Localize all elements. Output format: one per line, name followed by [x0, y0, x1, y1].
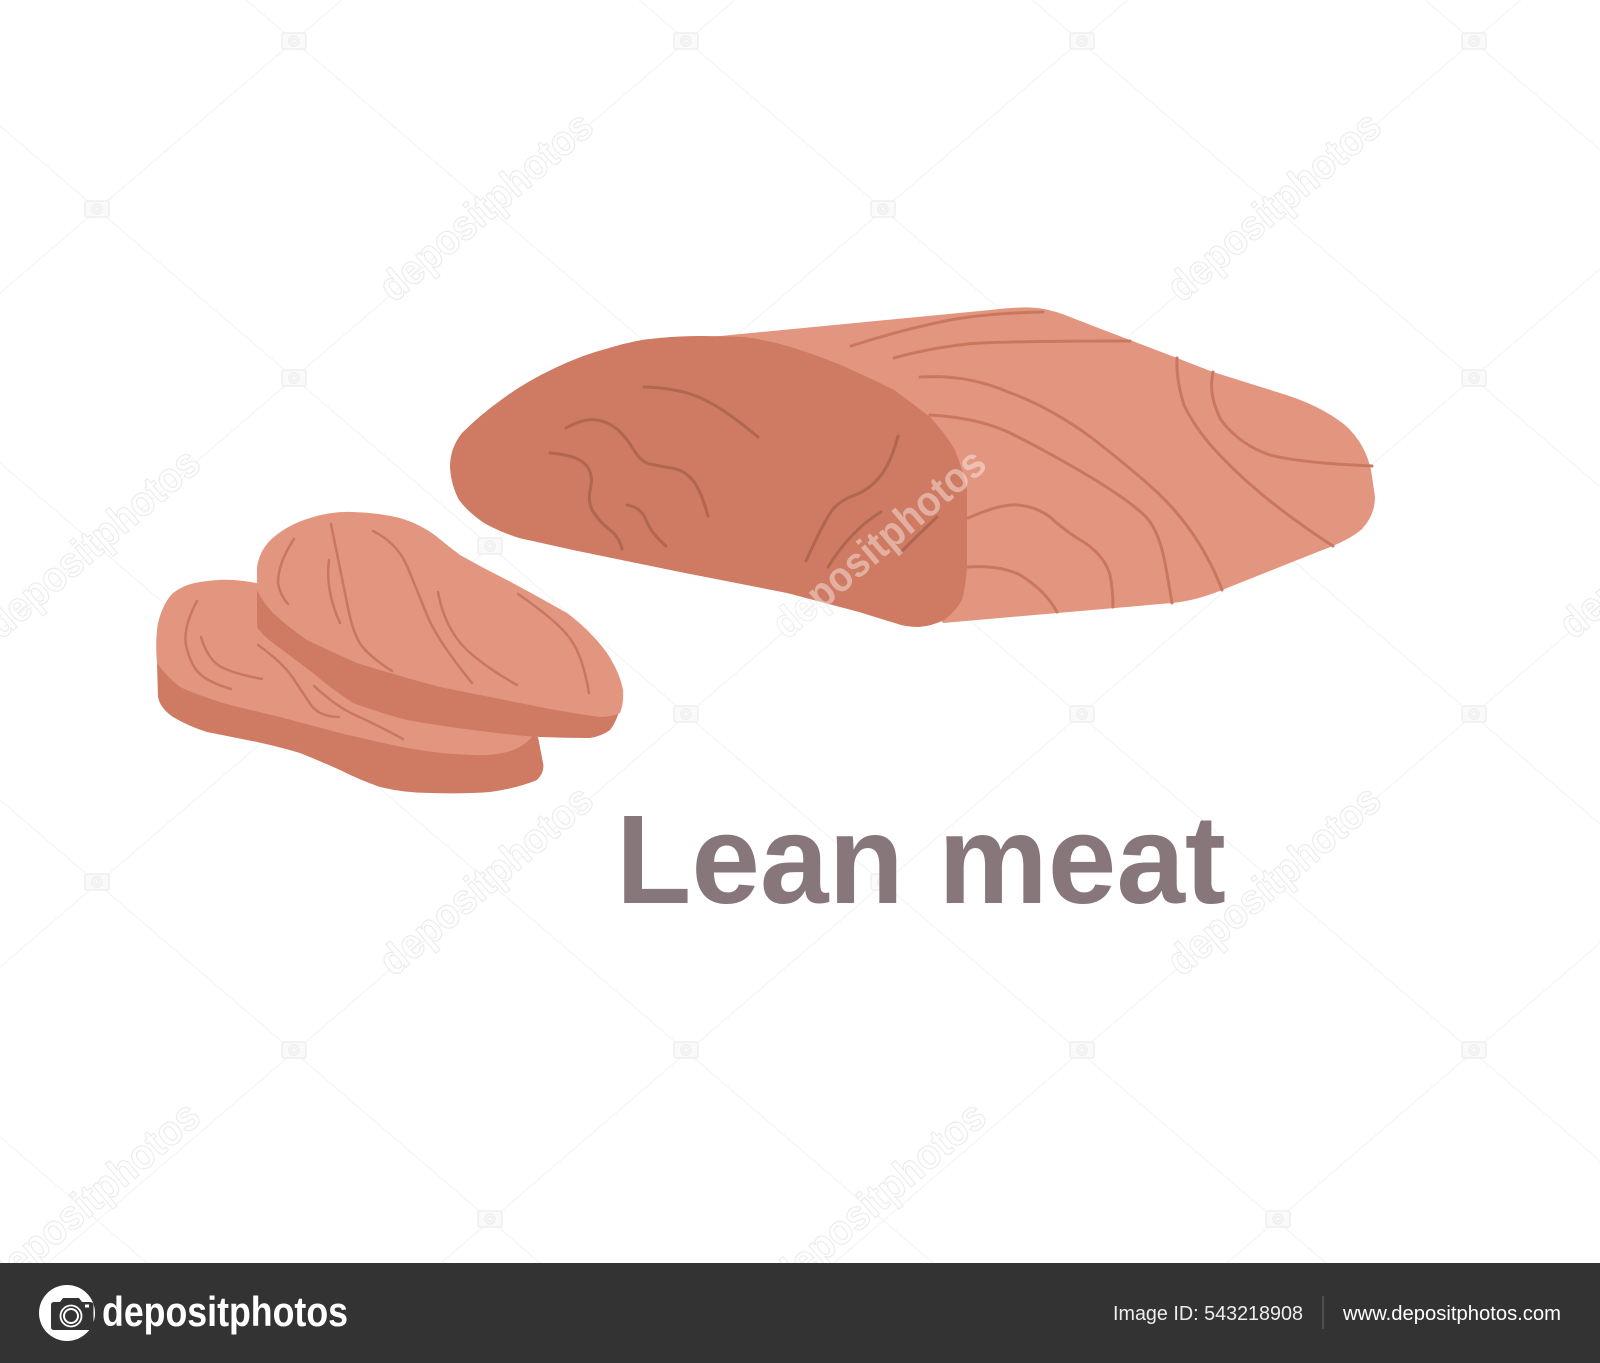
- front slice grain: [278, 524, 589, 693]
- watermark texts: depositphotos: [369, 102, 602, 310]
- watermark texts: depositphotos: [1157, 776, 1390, 984]
- footer bar: [0, 1263, 1600, 1363]
- watermark texts: depositphotos: [762, 1092, 995, 1300]
- illustration: meat slices: [156, 512, 623, 793]
- logo wordmark: depositphotos: [102, 1288, 348, 1335]
- watermark texts: depositphotos: [369, 776, 602, 984]
- meat body: [700, 307, 1375, 623]
- cut face: [450, 336, 967, 627]
- meat body grain: [851, 312, 1372, 612]
- divider: [1322, 1296, 1324, 1329]
- back slice top: [156, 580, 532, 755]
- back slice side: [157, 663, 543, 793]
- website: www.depositphotos.com: [1342, 1303, 1561, 1325]
- image id: Image ID: 543218908: [1113, 1303, 1303, 1325]
- front slice top: [257, 512, 623, 717]
- illustration: large meat piece: [450, 307, 1375, 647]
- watermark over meat: depositphotos: [762, 439, 995, 647]
- back slice grain: [185, 601, 403, 739]
- watermark texts: depositphotos: [1157, 102, 1390, 310]
- icon: camera logo: [39, 1285, 95, 1341]
- front slice side: [257, 590, 622, 738]
- title: Lean meat: [616, 789, 1226, 930]
- cut face grain: [550, 387, 937, 567]
- watermark texts: depositphotos: [762, 439, 995, 647]
